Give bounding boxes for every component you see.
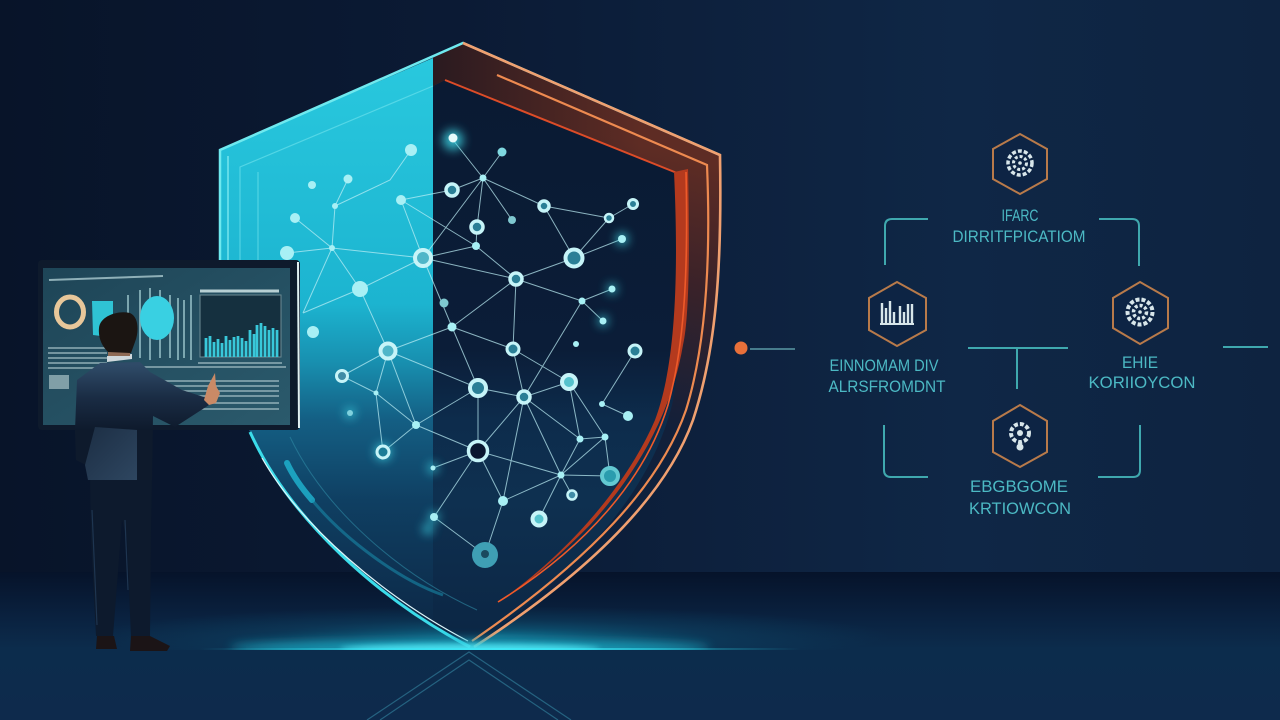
centre T connector (968, 348, 1068, 389)
network ring nodes (336, 184, 641, 568)
network nodes (280, 134, 633, 521)
screen header line (49, 276, 163, 280)
screen text lines (48, 348, 286, 409)
node: left (828, 282, 946, 396)
hexagon icon left (869, 282, 926, 346)
screen teal block (92, 301, 113, 336)
shield right dark half (433, 43, 720, 647)
connector from shield (734, 342, 795, 354)
hexagon icon top (993, 134, 1047, 194)
bracket top right (1099, 219, 1139, 266)
neck (108, 345, 130, 356)
shield thick red inner band (498, 169, 689, 602)
label top: IFARC (1002, 206, 1038, 225)
hexagon icon bottom (993, 405, 1047, 467)
jacket (75, 362, 209, 480)
jacket lower back highlight (85, 427, 137, 480)
screen donut chart (56, 297, 84, 327)
screen bar cluster (128, 288, 191, 360)
bracket top left (885, 219, 928, 265)
label left: EINNOMAM DIV (830, 356, 939, 375)
shield (220, 43, 720, 647)
node: top (952, 134, 1086, 246)
node: top: DIRRITFPICATIOM (952, 227, 1086, 246)
trouser highlights (92, 510, 128, 625)
node: left: ALRSFROMDNT (828, 377, 946, 396)
monitor (38, 260, 300, 430)
screen bar chart (206, 323, 277, 357)
person (75, 312, 220, 651)
floor (0, 572, 1280, 720)
node: bottom (969, 405, 1071, 518)
network edges (287, 140, 635, 555)
bracket bottom right (1098, 425, 1140, 477)
right shoe (130, 636, 170, 651)
right stub connector (1223, 346, 1268, 348)
floor reflection of shield (367, 652, 571, 720)
bracket bottom left (884, 425, 928, 477)
left shoe (96, 636, 117, 649)
screen cyan circle (140, 296, 174, 340)
monitor frame (38, 260, 300, 430)
shield left lower outlines (250, 432, 477, 647)
orange dot (734, 342, 748, 354)
screen qr block (49, 375, 69, 389)
collar (107, 354, 132, 362)
shield right rust band (433, 43, 720, 647)
network node glows (345, 130, 628, 534)
trousers (90, 478, 152, 638)
shield left inner lines (240, 86, 433, 270)
shield left cyan half (220, 58, 470, 647)
label bottom: EBGBGOME (970, 477, 1068, 496)
hair (99, 312, 138, 353)
shield top edge (220, 43, 720, 300)
monitor screen (43, 268, 290, 425)
shield apex band shade (433, 43, 640, 158)
ground light beam (200, 639, 800, 657)
node: bottom: KRTIOWCON (969, 499, 1071, 518)
hand (204, 373, 220, 405)
label right: EHIE (1122, 353, 1158, 372)
node: right: KORIIOYCON (1088, 373, 1196, 392)
screen chart panel (200, 295, 281, 357)
node: right (1088, 282, 1196, 392)
shield right orange outlines (445, 43, 720, 647)
hexagon icon right (1113, 282, 1168, 344)
